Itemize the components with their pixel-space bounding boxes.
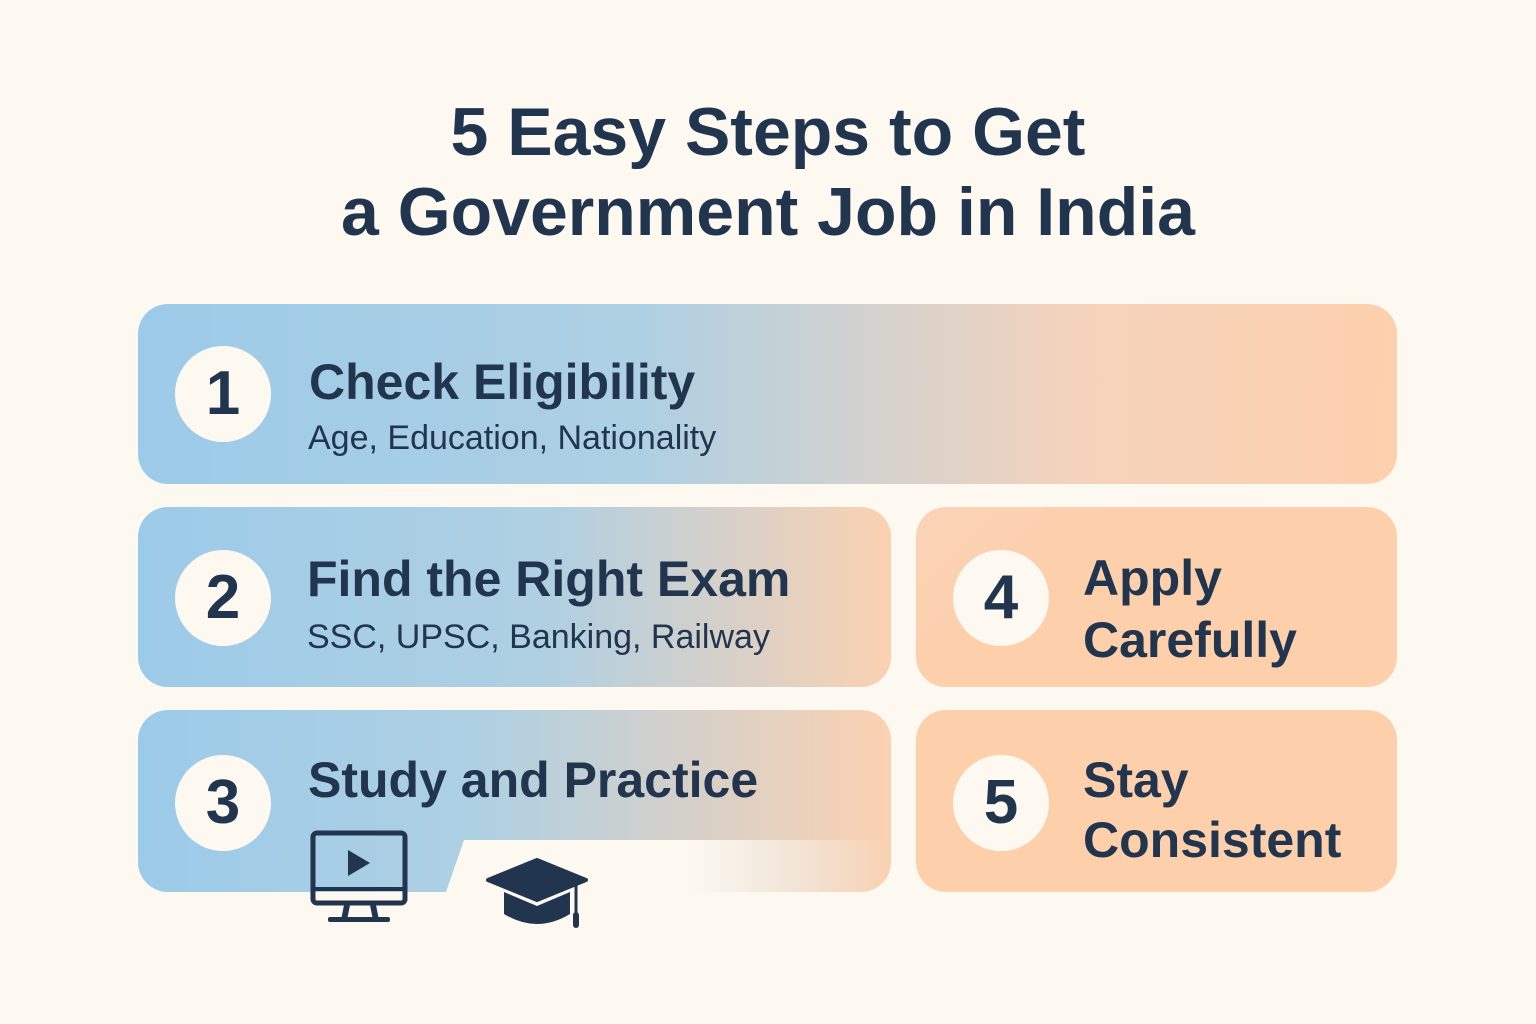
title (341, 94, 1196, 250)
step 4 number: 4 (984, 563, 1018, 632)
step 5 number (953, 755, 1049, 851)
step 4 heading: Carefully (1083, 612, 1297, 668)
step 2 number (175, 550, 271, 646)
cutout (446, 840, 891, 892)
step 2 heading: Find the Right Exam (307, 551, 790, 607)
step 2 subtitle: SSC, UPSC, Banking, Railway (307, 618, 770, 656)
step 4 number (953, 550, 1049, 646)
step 1 number (175, 346, 271, 442)
step 5 heading: Stay (1083, 752, 1189, 808)
step 4 heading (1083, 550, 1297, 668)
step 1 number: 1 (206, 359, 240, 428)
step 3 number: 3 (206, 768, 240, 837)
title: a Government Job in India (341, 174, 1195, 250)
panel: step 4 (916, 507, 1397, 687)
step 3 number (175, 755, 271, 851)
step 1 heading: Check Eligibility (309, 354, 695, 410)
panel: step 3 (138, 710, 891, 892)
icon: monitor with play (310, 830, 408, 922)
icon: graduation cap (486, 858, 588, 928)
step 2 number: 2 (206, 563, 240, 632)
step 5 number: 5 (984, 768, 1018, 837)
step 1 subtitle: Age, Education, Nationality (308, 419, 716, 457)
panel: step 5 (916, 710, 1397, 892)
panel: step 1 (138, 304, 1397, 484)
panel: step 2 (138, 507, 891, 687)
step 3 heading: Study and Practice (308, 752, 758, 808)
step 5 heading (1083, 752, 1341, 868)
title: 5 Easy Steps to Get (451, 94, 1085, 170)
step 5 heading: Consistent (1083, 812, 1341, 868)
step 4 heading: Apply (1083, 550, 1222, 606)
